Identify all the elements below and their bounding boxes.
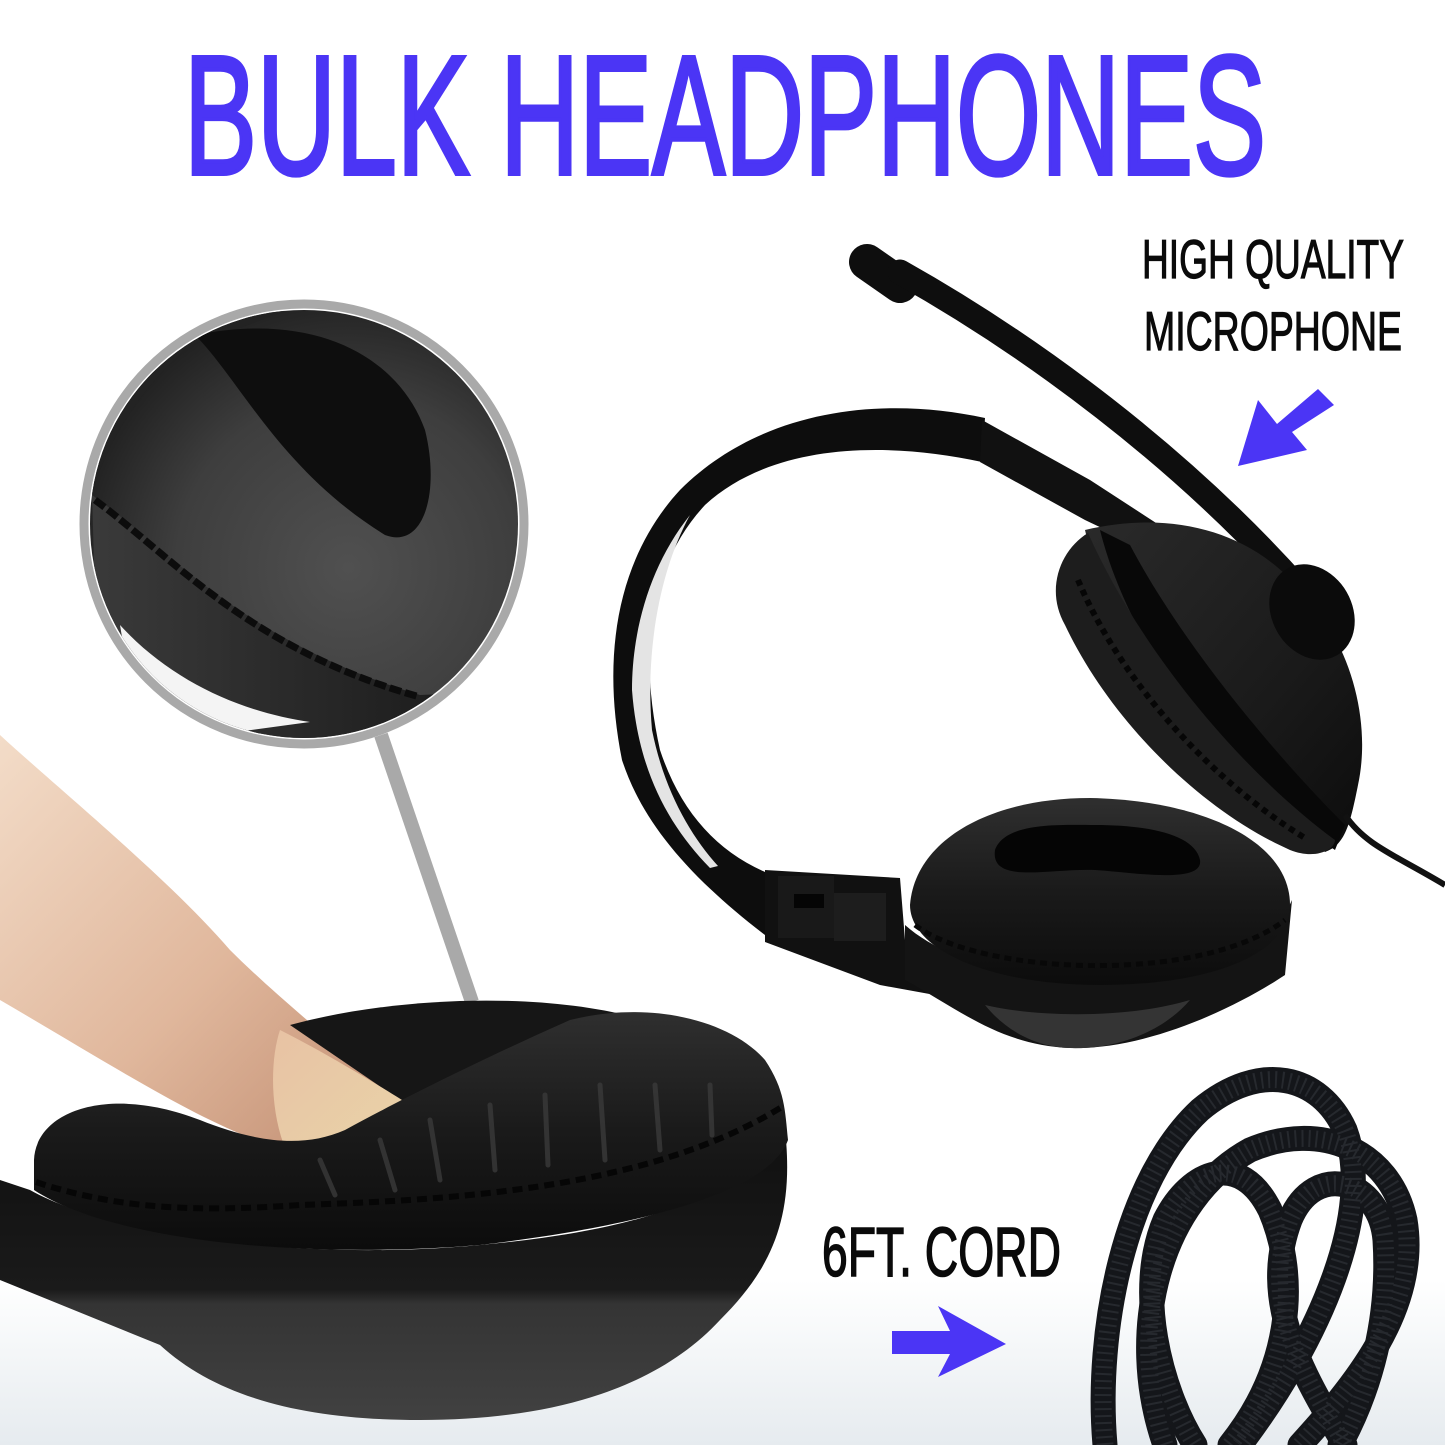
braided cord coil: [1103, 1080, 1407, 1445]
cushion: [34, 1012, 788, 1250]
finger: [0, 735, 402, 1148]
finger nail: [273, 1030, 402, 1148]
upper ear cup: [1056, 522, 1372, 854]
headset photo: [613, 262, 1445, 1048]
cable: [1345, 815, 1445, 885]
microphone boom: [867, 262, 1300, 590]
callout: zoomed ear pad: [84, 304, 530, 760]
large ear cup: [0, 1001, 788, 1420]
arrow: to cord: [892, 1306, 1006, 1377]
label: high quality microphone: [1142, 228, 1404, 362]
cushion wrinkles: [320, 1085, 712, 1195]
inner pad rim: [290, 1001, 660, 1100]
lower ear cup: [905, 798, 1292, 1048]
arrow: to microphone: [1238, 389, 1334, 466]
label: 6ft. cord: 6FT. CORD: [822, 1213, 1061, 1291]
base shell: [0, 1130, 787, 1420]
callout connector line: [381, 735, 472, 1002]
headband: [613, 408, 1190, 1005]
cushion seam: [36, 1105, 785, 1208]
